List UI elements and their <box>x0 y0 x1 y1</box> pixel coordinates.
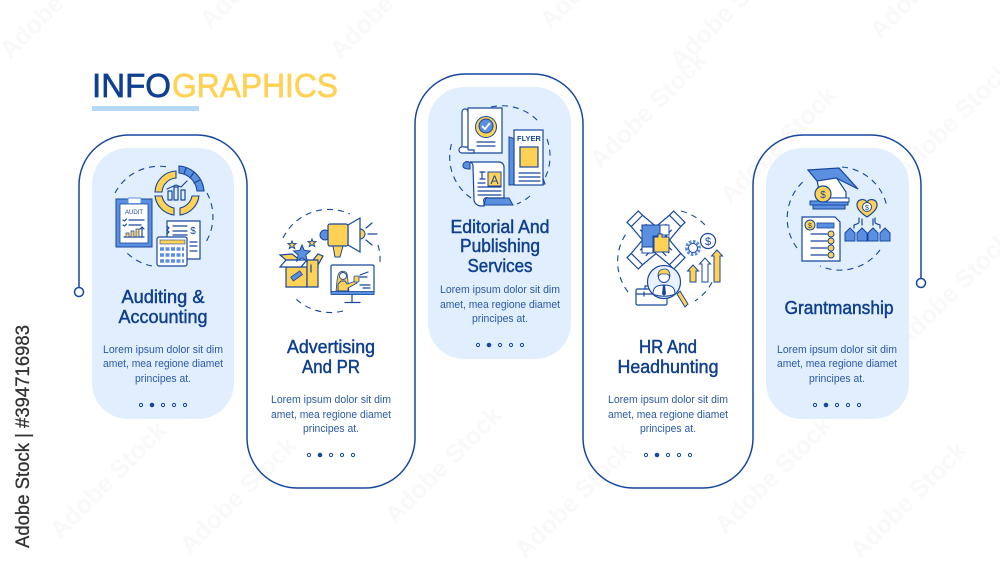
heading: Publishing <box>460 236 540 256</box>
icon: audit clipboard, donut chart and calculator: AUDIT <box>125 210 143 216</box>
body text: Lorem ipsum dolor sit dim <box>103 344 223 356</box>
icon: hands with puzzle, growth arrows and magnifier <box>618 210 722 307</box>
title: INFO <box>92 67 171 104</box>
icon: graduation cap, grant form, heart and houses: $ <box>865 205 869 212</box>
heading: Headhunting <box>618 357 718 377</box>
heading: Accounting <box>118 307 208 327</box>
text: Adobe Stock <box>844 436 972 563</box>
icon: megaphone, box and monitor <box>280 209 380 313</box>
heading <box>450 217 550 276</box>
heading <box>118 287 208 327</box>
text: Adobe Stock <box>379 401 507 529</box>
body text: Lorem ipsum dolor sit dim <box>608 394 728 406</box>
panel: advertising and PR <box>271 209 391 457</box>
icon: audit clipboard, donut chart and calculator: $ <box>190 226 196 237</box>
body text: principes at. <box>640 423 696 435</box>
connecting outline <box>74 74 926 488</box>
body text <box>777 344 897 385</box>
heading: Auditing & <box>122 287 204 307</box>
heading <box>618 337 718 377</box>
heading: Advertising <box>287 337 375 357</box>
heading: Editorial And <box>450 217 550 237</box>
text: Adobe Stock <box>714 81 842 209</box>
body text: principes at. <box>303 423 359 435</box>
text: Adobe Stock <box>509 436 637 563</box>
body text: principes at. <box>135 373 191 385</box>
text: Adobe Stock <box>709 411 837 539</box>
panel: HR and headhunting <box>608 210 728 457</box>
body text: amet, mea regione diamet <box>440 299 560 311</box>
title <box>92 67 338 111</box>
stock id label: Adobe Stock | #394716983 <box>13 325 34 548</box>
heading: And PR <box>302 357 360 377</box>
pagination dots <box>476 343 524 347</box>
text: Adobe Stock <box>174 431 302 559</box>
panel: grantmanship <box>766 148 909 419</box>
heading: HR And <box>639 337 697 357</box>
body text <box>103 344 223 385</box>
pagination dots <box>307 453 355 457</box>
body text <box>271 394 391 435</box>
panel: auditing and accounting <box>92 148 234 419</box>
body text: principes at. <box>472 313 528 325</box>
body text: Lorem ipsum dolor sit dim <box>777 344 897 356</box>
pagination dots <box>139 403 187 407</box>
body text <box>440 284 560 325</box>
body text <box>608 394 728 435</box>
heading <box>287 337 375 377</box>
title: GRAPHICS <box>172 67 338 104</box>
body text: Lorem ipsum dolor sit dim <box>440 284 560 296</box>
icon: audit clipboard, donut chart and calculator <box>115 166 213 266</box>
icon: certificate, flyer and scroll: A <box>490 173 499 187</box>
pagination dots <box>813 403 861 407</box>
heading: Grantmanship <box>784 298 894 318</box>
body text: amet, mea regione diamet <box>271 409 391 421</box>
icon: certificate, flyer and scroll: FLYER <box>517 134 542 143</box>
panel: editorial and publishing <box>428 87 571 359</box>
text: Adobe Stock <box>44 416 172 544</box>
icon: certificate, flyer and scroll <box>450 106 550 206</box>
body text: amet, mea regione diamet <box>608 409 728 421</box>
text: Adobe Stock <box>584 46 712 174</box>
body text: principes at. <box>809 373 865 385</box>
icon: graduation cap, grant form, heart and houses: $ <box>808 223 812 230</box>
body text: Lorem ipsum dolor sit dim <box>271 394 391 406</box>
pagination dots <box>644 453 692 457</box>
icon: graduation cap, grant form, heart and houses: $ <box>820 190 826 201</box>
body text: amet, mea regione diamet <box>777 358 897 370</box>
icon: hands with puzzle, growth arrows and magnifier: $ <box>705 236 711 248</box>
body text: amet, mea regione diamet <box>103 358 223 370</box>
heading: Services <box>468 256 532 276</box>
icon: graduation cap, grant form, heart and houses <box>787 167 890 270</box>
